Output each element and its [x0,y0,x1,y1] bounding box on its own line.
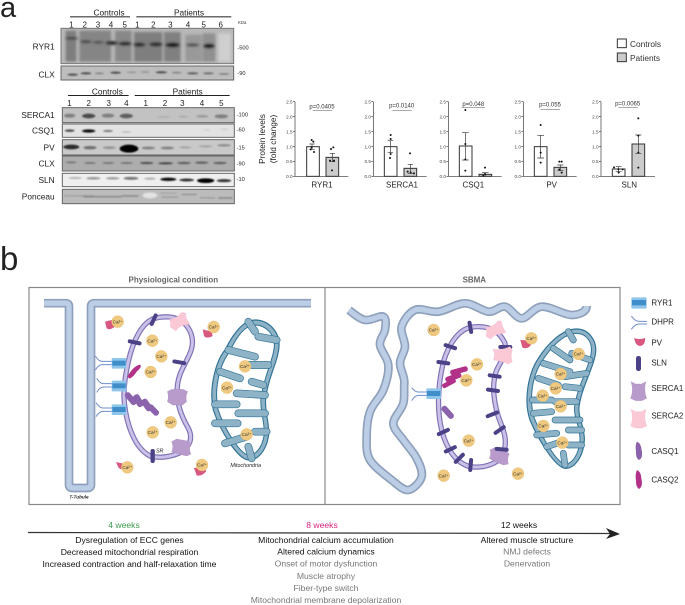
blot: SERCA1 [62,108,234,123]
legend labels: SERCA1 [651,384,684,393]
timeline: 4 weeks: Dysregulation of ECC genes [75,535,184,545]
chart: CSQ1: CSQ1 [462,180,485,189]
CASQ1 protein [440,405,455,420]
calcium labels: Ca²⁺ [526,336,537,341]
legend: schematic components [631,297,684,489]
chart: CSQ1 [440,99,502,189]
label: mitochondria: Mitochondria [230,463,261,469]
SLN on SERCA1 [495,447,509,452]
timeline: 8 weeks: Mitochondrial calcium accumulation [258,535,394,545]
lane numbers lower: 4 [200,99,205,108]
marker sizes upper [237,45,249,77]
marker labels upper: RYR1 [33,41,55,51]
y axis title: Protein levels [257,114,267,164]
sarcoplasmic reticulum [124,317,192,457]
SLN proteins [127,313,187,463]
chart: PV [515,99,577,189]
timeline: 8 weeks [251,520,401,605]
chart: SERCA1: 0.0 [365,174,371,179]
icon: DHPR [631,316,647,329]
chart: SERCA1: p=0.0140 [389,104,415,110]
chart: SERCA1: 2.0 [365,114,371,119]
calcium labels: Ca²⁺ [222,385,233,390]
timeline: 12 weeks: Altered muscle structure [481,535,574,545]
timeline: 4 weeks: Decreased mitochondrial respiration [61,547,198,557]
calcium labels [113,319,252,470]
chart: RYR1 [286,99,348,189]
icon: SERCA2 [631,409,647,428]
lane numbers lower: 5 [219,99,224,108]
panel: physiological condition [44,276,311,499]
mitochondrion [527,329,596,468]
marker labels lower: CLX [38,159,55,169]
legend labels: SLN [651,359,667,368]
blot: CSQ1 [62,124,234,137]
icon: PV [634,338,645,346]
chart: PV: 0.0 [515,174,521,179]
timeline: 8 weeks: Onset of motor dysfunction [275,558,378,568]
marker sizes lower: -15 [237,146,245,152]
lane numbers upper: 2 [151,21,156,30]
legend labels: CASQ1 [651,447,679,456]
y axis title [257,114,278,164]
chart: SERCA1: 1.0 [365,144,371,149]
calcium labels: Ca²⁺ [240,364,251,369]
panel: western blots [21,8,249,204]
calcium labels: Ca²⁺ [197,463,208,468]
SLN proteins [436,320,512,472]
lane numbers upper: 4 [186,21,191,30]
lane numbers upper: 3 [96,21,101,30]
calcium labels: Ca²⁺ [146,370,156,375]
lane numbers lower: 3 [180,99,185,108]
chart: SERCA1: SERCA1 [386,180,419,189]
legend: Controls [630,39,661,49]
marker sizes lower [237,113,248,183]
lane numbers upper: 2 [82,21,87,30]
calcium labels: Ca²⁺ [209,325,219,330]
calcium labels: Ca²⁺ [122,465,133,470]
chart: PV: 0.5 [515,159,521,164]
heading: controls lower [68,86,129,96]
heading: controls lower: Controls [92,86,123,96]
timeline: 8 weeks: Muscle atrophy [297,571,356,581]
chart: CSQ1: 2.5 [440,99,446,104]
SERCA2 pumps [485,321,512,364]
lane numbers lower: 4 [124,99,129,108]
timeline: 12 weeks: 12 weeks [501,520,537,530]
legend labels: RYR1 [651,298,673,307]
calcium labels: Ca²⁺ [557,440,568,445]
RYR1 channel [426,388,441,399]
DHPR receptors [95,356,112,417]
calcium ions [428,324,585,482]
DHPR receptor [412,388,427,401]
SERCA2 pump [169,312,190,331]
PV protein [520,340,531,348]
SERCA1 pump [489,447,509,465]
CASQ2 protein [127,365,141,379]
calcium labels: Ca²⁺ [242,432,252,437]
kDa label: KDa [238,20,247,25]
T-tubule membrane [44,303,311,488]
chart: CSQ1: 1.5 [440,129,446,134]
chart: SERCA1: 2.5 [365,99,371,104]
legend labels: DHPR [651,317,674,326]
chart: PV: 1.5 [515,129,521,134]
chart: SERCA1: 0.5 [365,159,371,164]
chart: SLN: p=0.0065 [615,101,641,107]
heading: patients lower [135,86,230,96]
calcium labels: Ca²⁺ [556,404,566,409]
chart: RYR1: 2.0 [286,114,293,119]
marker labels upper: CLX [38,69,55,79]
chart: PV: PV [546,180,558,189]
marker labels lower: SERCA1 [21,110,55,120]
icon: CASQ1 [636,442,642,460]
marker sizes lower: -60 [237,127,245,133]
chart: RYR1: 0.0 [286,174,293,179]
bar charts [286,39,661,189]
calcium labels: Ca²⁺ [156,354,167,359]
marker labels upper [33,41,55,79]
marker sizes lower: -10 [237,177,245,183]
heading: controls upper [70,8,130,18]
lane numbers lower: 1 [67,99,72,108]
lane numbers lower: 2 [163,99,168,108]
chart: RYR1: p=0.0405 [309,105,335,111]
blot: SLN [62,173,234,187]
SERCA1 pumps [167,389,191,456]
lane numbers upper: 3 [168,21,173,30]
calcium labels: Ca²⁺ [464,438,474,443]
chart: SLN: 2.5 [592,99,599,104]
chart: RYR1: 1.5 [286,129,293,134]
chart: PV: 1.0 [515,144,521,149]
CASQ1 chain [124,391,160,417]
chart: SERCA1: 1.5 [365,129,371,134]
PV proteins [105,320,213,476]
y axis title: (fold change) [268,115,278,163]
chart: SLN: 0.5 [592,159,599,164]
calcium labels: Ca²⁺ [538,424,549,429]
icon: RYR1 [631,297,647,309]
chart: SLN: SLN [622,180,637,189]
label: T-tubule: T-Tubule [69,494,89,499]
lane numbers upper: 4 [109,21,114,30]
lane numbers upper: 5 [201,21,206,30]
marker labels lower: SLN [38,175,55,185]
timeline: 4 weeks: 4 weeks [108,520,140,530]
calcium ions [112,316,253,473]
timeline: 12 weeks: Denervation [504,558,550,568]
chart: RYR1: RYR1 [311,180,333,189]
chart: PV: 2.0 [515,114,521,119]
panel: SBMA [349,276,684,490]
calcium labels: Ca²⁺ [556,372,566,377]
heading: patients lower: Patients [173,86,203,96]
icon: CASQ2 [636,470,642,489]
calcium labels: Ca²⁺ [472,362,483,367]
chart: SLN: 1.5 [592,129,599,134]
timeline: 12 weeks [481,520,574,568]
lane numbers upper: 1 [135,21,140,30]
lane numbers lower: 3 [106,99,111,108]
legend: Patients [630,53,660,63]
mitochondrion [212,320,279,460]
heading: physiological condition: Physiological condition [129,276,218,285]
legend labels [651,298,684,484]
marker sizes lower: -100 [237,113,248,119]
blot: CLX lower [62,156,234,171]
legend labels: SERCA2 [651,411,684,420]
timeline arrow [28,528,620,539]
calcium labels: Ca²⁺ [166,420,176,425]
icon: SERCA1 [631,382,647,401]
heading: controls upper: Controls [93,8,125,18]
timeline: 12 weeks: NMJ defects [503,546,551,556]
blot: Ponceau [62,189,234,204]
calcium labels: Ca²⁺ [429,328,439,333]
chart: SLN: 2.0 [592,114,599,119]
marker labels lower [21,110,55,202]
marker labels lower: CSQ1 [32,125,55,135]
CASQ2 proteins [441,366,468,389]
blot: CLX upper [61,66,234,80]
calcium labels: Ca²⁺ [513,471,524,476]
timeline: 4 weeks [43,520,217,569]
chart: RYR1: 2.5 [286,99,293,104]
chart: CSQ1: 2.0 [440,114,446,119]
RYR1 channels [112,358,126,415]
legend labels: PV [651,339,663,348]
chart: PV: 2.5 [515,99,521,104]
marker sizes lower: -90 [237,162,245,168]
calcium labels: Ca²⁺ [439,473,449,478]
timeline: 8 weeks: Mitochondrial membrane depolarization [251,595,401,605]
chart: SLN [592,99,655,189]
calcium labels: Ca²⁺ [461,378,472,383]
heading: SBMA: SBMA [463,276,486,285]
timeline: 4 weeks: Increased contraction and half-relaxation time [43,559,217,569]
sarcoplasmic reticulum [439,327,505,467]
lane numbers upper: 1 [69,21,74,30]
calcium labels: Ca²⁺ [574,352,584,357]
timeline: 8 weeks: 8 weeks [306,520,338,530]
chart: CSQ1: 0.5 [440,159,446,164]
chart: SLN: 1.0 [592,144,599,149]
timeline: 8 weeks: Altered calcium dynamics [277,546,375,556]
calcium labels: Ca²⁺ [551,386,561,391]
lane numbers upper: 5 [122,21,127,30]
calcium labels [429,328,584,478]
chart: CSQ1: 0.0 [440,174,446,179]
calcium labels: Ca²⁺ [113,319,123,324]
blot: PV [62,140,234,155]
timeline: 8 weeks: Fiber-type switch [294,583,359,593]
panel label b: b [0,240,18,277]
marker sizes upper: -500 [237,45,249,51]
chart: RYR1: 1.0 [286,144,293,149]
legend labels: CASQ2 [651,475,679,484]
calcium labels: Ca²⁺ [147,338,158,343]
chart: CSQ1: p=0.048 [462,102,485,108]
wavy T-tubule membrane [349,303,587,490]
chart: SERCA1 [365,99,427,189]
legend [617,39,661,63]
icon: SLN [636,356,641,371]
chart: RYR1: 0.5 [286,159,293,164]
marker labels lower: PV [44,142,55,152]
frame of schematic panels [29,288,620,504]
chart: CSQ1: 1.0 [440,144,446,149]
blot: RYR1 [61,28,234,64]
chart: SLN: 0.0 [592,174,599,179]
chart: PV: p=0.055 [539,103,562,109]
lane numbers lower: 1 [143,99,148,108]
lane numbers upper [69,21,223,30]
heading: patients upper [136,8,231,18]
lane numbers lower [67,99,224,108]
heading: patients upper: Patients [174,8,204,18]
lane numbers lower: 2 [86,99,91,108]
calcium labels: Ca²⁺ [148,430,158,435]
marker labels lower: Ponceau [22,192,55,202]
label: SR: SR [156,448,164,454]
marker sizes upper: -90 [237,71,246,77]
calcium labels: Ca²⁺ [538,393,548,398]
lane numbers upper: 6 [218,21,223,30]
